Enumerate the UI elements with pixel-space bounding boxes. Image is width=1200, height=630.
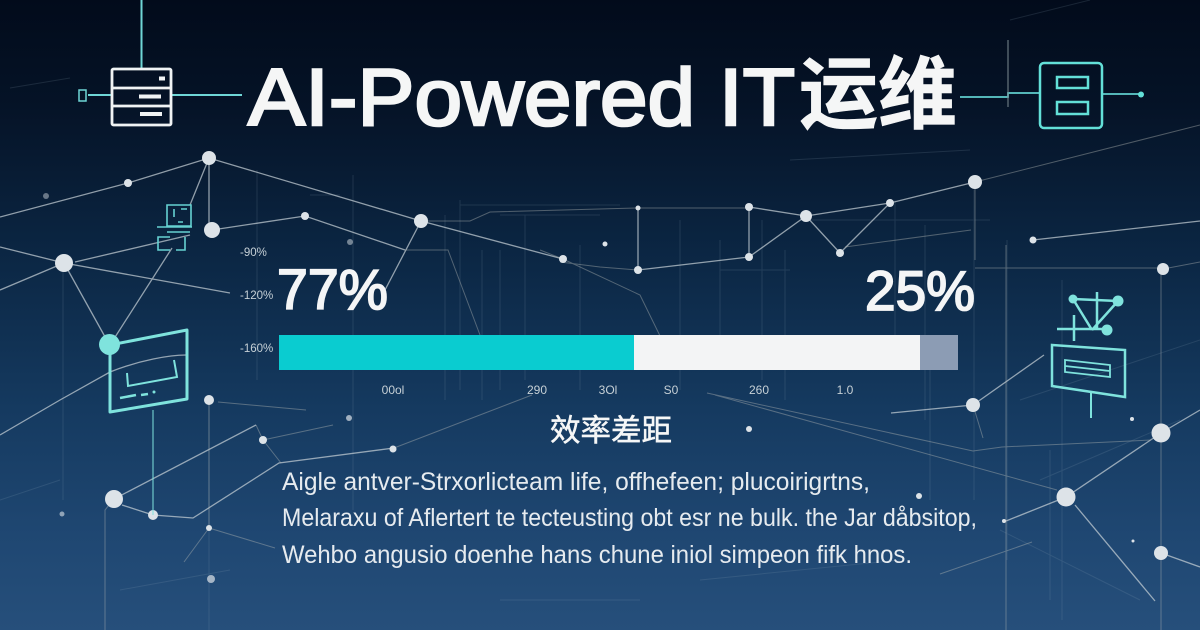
bar scale labels: 00ol — [382, 383, 404, 397]
comparison bar — [279, 335, 958, 370]
icon: small circuit — [157, 205, 192, 250]
description text: Aigle antver-Strxorlicteam life, offhefeen; plucoirigrtns, — [282, 468, 870, 496]
left axis labels — [240, 247, 273, 355]
bar scale labels: 3Ol — [599, 383, 617, 397]
bar scale labels: S0 — [664, 383, 679, 397]
bar scale labels: 290 — [527, 383, 547, 397]
bar scale labels — [382, 383, 854, 397]
network nodes — [43, 151, 1170, 583]
description text: Melaraxu of Aflertert te tecteusting obt esr ne bulk. the Jar dåbsitop, — [282, 504, 977, 532]
stat: 25%: 25% — [865, 259, 975, 322]
icon: network panel — [1052, 292, 1125, 418]
network lines: bright — [0, 158, 1200, 601]
icon: server rack — [79, 0, 242, 125]
description text — [282, 468, 977, 569]
description text: Wehbo angusio doenhe hans chune iniol simpeon fifk hnos. — [282, 541, 912, 569]
chart caption: 效率差距 — [550, 414, 672, 448]
title: 运维 — [799, 50, 957, 139]
left axis labels: -120% — [240, 290, 273, 302]
network lines: dim — [105, 125, 1200, 630]
left axis labels: -160% — [240, 343, 273, 355]
left axis labels: -90% — [240, 247, 267, 259]
title: AI-Powered IT — [248, 53, 795, 143]
bar scale labels: 260 — [749, 383, 769, 397]
bar scale labels: 1.0 — [837, 383, 854, 397]
icon: monitor panel — [99, 330, 187, 515]
icon: teal device — [960, 40, 1144, 128]
stat: 77%: 77% — [277, 258, 388, 322]
